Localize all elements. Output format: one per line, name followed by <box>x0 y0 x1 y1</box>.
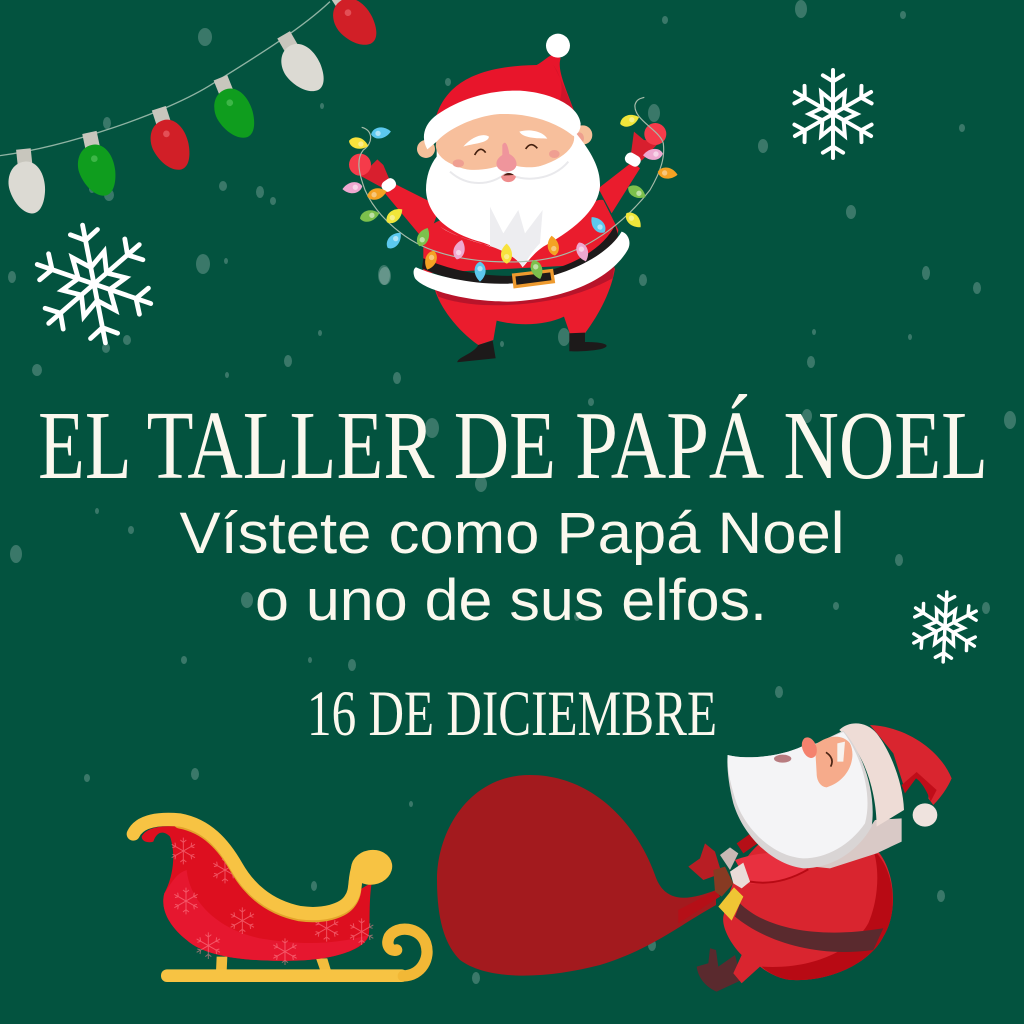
rim shadow <box>180 822 358 916</box>
subtitle line 2: o uno de sus elfos. <box>255 568 767 633</box>
snowflake: right <box>909 590 981 664</box>
belt <box>735 903 883 952</box>
gold rim <box>133 819 358 914</box>
hat band <box>424 91 581 149</box>
eyes <box>475 145 537 155</box>
boot <box>697 948 742 992</box>
buckle <box>514 271 553 287</box>
body <box>723 840 893 983</box>
bulb: red <box>319 0 384 55</box>
hat <box>870 725 952 805</box>
nose <box>799 735 820 760</box>
cheeks <box>453 159 464 167</box>
bulb: green <box>71 129 120 200</box>
belt <box>422 225 618 286</box>
beard <box>426 130 600 267</box>
bulb: red <box>141 103 196 176</box>
bulb: white <box>5 147 48 216</box>
nose <box>496 143 517 172</box>
fairy bulbs <box>342 112 678 282</box>
Santa pulling sack <box>678 723 952 992</box>
sack tie <box>688 843 722 880</box>
subtitle line 1: Vístete como Papá Noel <box>180 501 844 566</box>
hat band <box>839 723 904 827</box>
eyebrows <box>463 130 547 147</box>
bulb: green <box>203 71 261 145</box>
pompom <box>546 34 570 58</box>
light string <box>359 97 664 262</box>
gloves <box>720 847 738 870</box>
mustache <box>440 145 582 191</box>
collar <box>813 818 902 868</box>
face <box>434 106 576 177</box>
cuffs <box>380 176 398 194</box>
pompom <box>913 803 937 827</box>
bulb: white <box>268 26 331 100</box>
beard <box>727 731 873 868</box>
bell <box>718 887 743 921</box>
face <box>815 737 852 787</box>
snowflake: upper right <box>790 70 876 158</box>
sleigh body <box>142 826 372 961</box>
snowflake: upper left <box>25 214 163 354</box>
Santa with fairy lights <box>342 34 678 362</box>
sack <box>437 775 716 976</box>
torso <box>423 200 618 273</box>
sack rope <box>678 890 720 923</box>
arm <box>735 853 808 884</box>
mouth <box>774 755 791 763</box>
runner <box>161 969 408 982</box>
eye <box>826 752 832 767</box>
legs <box>435 268 615 345</box>
sleigh snowflake pattern <box>172 838 373 965</box>
struts <box>216 957 331 972</box>
arms <box>385 162 640 243</box>
strap <box>737 833 760 853</box>
boots <box>457 333 607 362</box>
date: 16 DE DICIEMBRE <box>307 678 717 750</box>
hat <box>435 53 575 120</box>
ears <box>417 140 435 158</box>
eyebrow <box>837 742 845 762</box>
rope knot <box>713 867 733 897</box>
fur trim <box>414 232 629 302</box>
mouth <box>501 173 516 182</box>
string of Christmas lights <box>0 0 384 216</box>
mittens <box>361 159 389 187</box>
sleigh <box>133 819 427 982</box>
